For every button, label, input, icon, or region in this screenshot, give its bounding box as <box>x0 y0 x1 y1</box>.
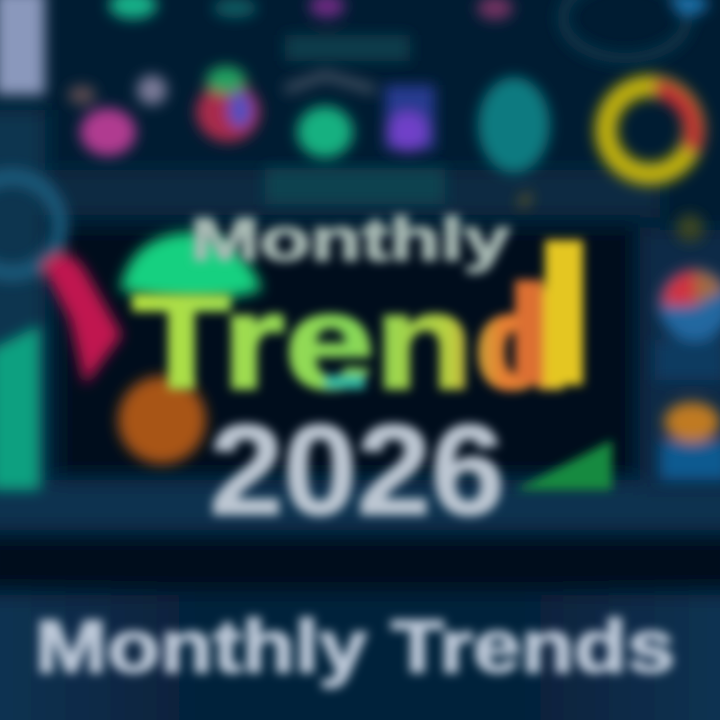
top row icons <box>0 0 708 204</box>
second row icons <box>68 66 704 242</box>
heading: Monthly: Monthly <box>190 206 511 273</box>
heading: Trends: Trend <box>132 266 572 417</box>
heading: Trends <box>132 240 583 417</box>
green arrow accent <box>515 440 612 490</box>
green blob and coin <box>118 232 262 464</box>
footer title: Monthly Trends <box>35 605 675 688</box>
heading: 2026: 2026 <box>210 399 504 542</box>
right side decorations <box>655 269 720 480</box>
left side decorations <box>0 177 122 490</box>
